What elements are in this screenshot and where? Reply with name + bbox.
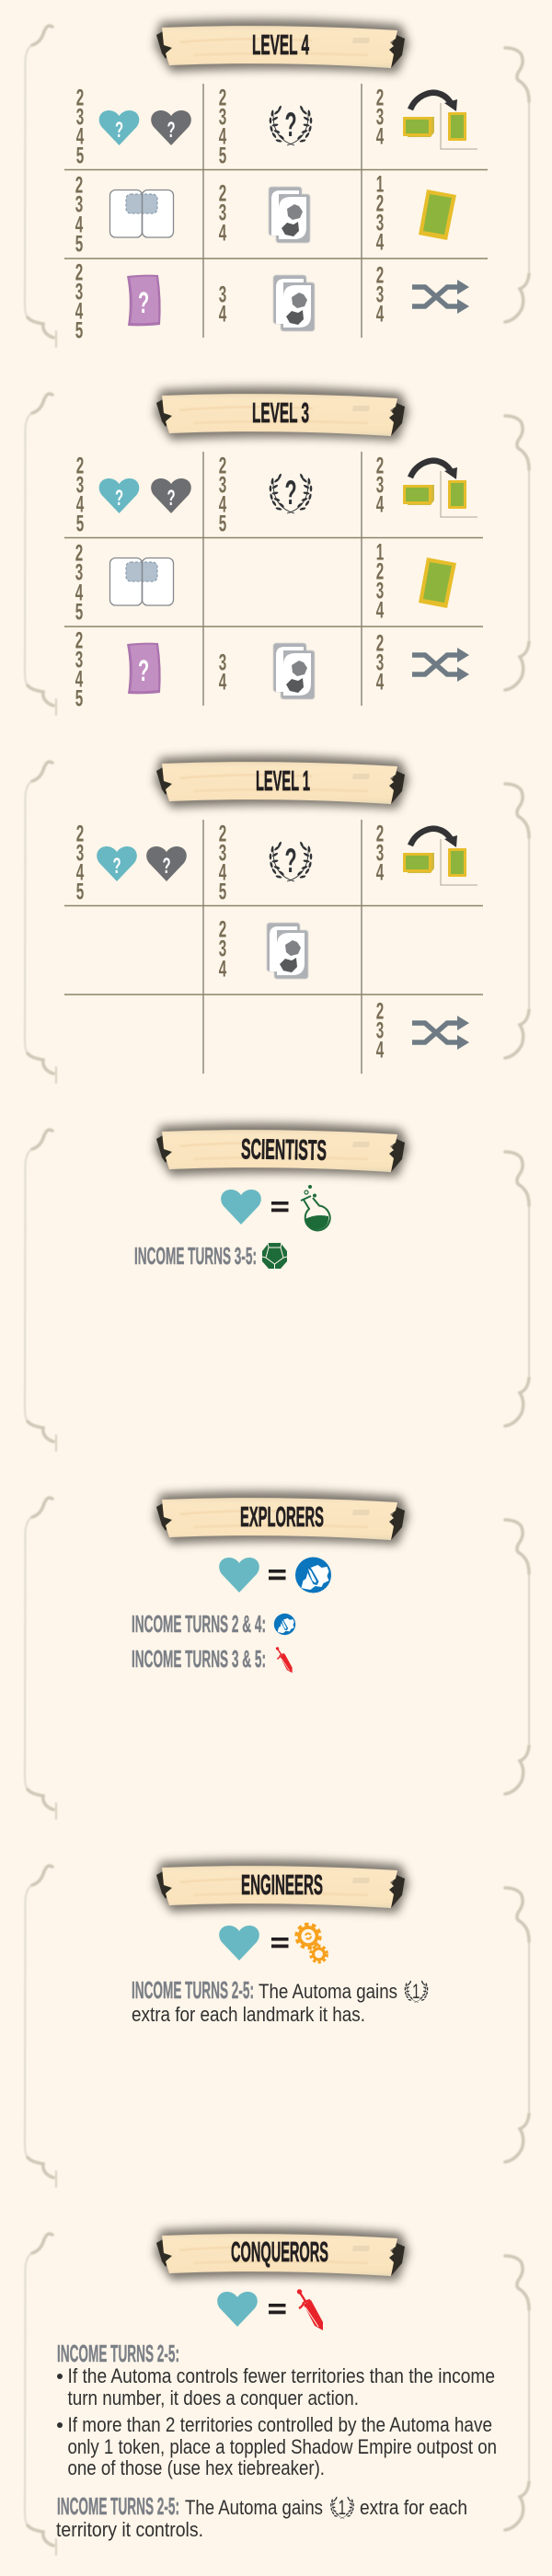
banner: engineers <box>155 1859 408 1913</box>
icon: deck with digits: 2 <box>219 917 226 943</box>
icon: card move with digits: 4 <box>376 124 385 150</box>
icon: deck with digits: 4 <box>219 221 227 247</box>
income line: turns 3 and 5 <box>132 1645 293 1673</box>
icon: card move with digits: 2 <box>376 86 384 111</box>
income text <box>132 1976 428 2026</box>
icon: shuffle with digits: 3 <box>376 1018 384 1044</box>
income bonus text: territory it controls. <box>56 2518 203 2541</box>
income line: turns 2 and 4 <box>132 1610 295 1638</box>
icon: laurel with digits <box>219 454 312 537</box>
icon: card move with digits: 3 <box>376 841 384 867</box>
icon: laurel with digits: 4 <box>219 492 227 518</box>
icon: deck with digits: 3 <box>219 937 226 962</box>
icon: card move with digits <box>376 454 477 518</box>
icon: purple card with digits: 4 <box>75 299 84 325</box>
income text: 1 <box>412 1980 420 2003</box>
icon: shuffle with digits: 2 <box>376 263 384 289</box>
icon: green card with digits: 4 <box>376 598 385 624</box>
icon: split cards with digits: 2 <box>75 541 83 567</box>
icon: laurel with digits: 5 <box>219 512 226 537</box>
banner: explorers <box>155 1491 408 1545</box>
icon: laurel with digits: ? <box>284 107 297 144</box>
icon: deck 3 4: 3 <box>219 650 226 676</box>
icon: green card with digits: 4 <box>376 230 385 256</box>
income bonus text: extra for each <box>360 2496 467 2519</box>
icon: purple card with digits: ? <box>138 654 149 687</box>
icon: purple card with digits: 3 <box>75 648 83 673</box>
icon: shuffle with digits: 2 <box>376 999 384 1025</box>
icon: deck 3 4: 4 <box>219 302 227 328</box>
banner: engineers: ENGINEERS <box>241 1869 323 1901</box>
icon: laurel with digits: 3 <box>219 105 226 131</box>
income line: INCOME TURNS 3-5: <box>134 1242 257 1270</box>
heart equals flask <box>221 1185 330 1230</box>
icon: green card with digits: 1 <box>376 172 384 198</box>
icon: shuffle with digits: 4 <box>376 1038 385 1064</box>
income text: INCOME TURNS 2-5: <box>132 1976 254 2004</box>
icon: laurel with digits: 3 <box>219 473 226 499</box>
heart equals gears <box>219 1925 327 1962</box>
icon: green card with digits: 3 <box>376 579 384 604</box>
icon: laurel with digits: ? <box>284 475 297 512</box>
icon: laurel with digits: 2 <box>219 454 226 479</box>
income rules text: one of those (use hex tiebreaker). <box>68 2456 325 2479</box>
income text: The Automa gains <box>259 1980 397 2003</box>
icon: split cards with digits: 5 <box>75 232 83 258</box>
icon: card move with digits: 3 <box>376 105 384 131</box>
icon: deck with digits: 3 <box>219 201 226 226</box>
income line: turns 2 and 4: INCOME TURNS 2 & 4: <box>132 1610 266 1638</box>
panel: explorers <box>25 1491 529 1819</box>
panel: level 4 <box>25 19 529 347</box>
icon: shuffle with digits: 3 <box>376 282 384 308</box>
icon: laurel with digits: 3 <box>219 841 226 867</box>
icon: deck with digits <box>219 917 308 983</box>
icon: hearts with digits <box>76 454 191 537</box>
icon: split cards with digits <box>75 541 173 626</box>
banner: level 3 <box>155 387 408 441</box>
banner: conquerors: CONQUERORS <box>231 2236 328 2268</box>
icon: hearts with digits: 2 <box>76 454 84 479</box>
icon: shuffle with digits: 2 <box>376 631 384 657</box>
icon: deck with digits <box>219 181 310 247</box>
icon: shuffle with digits <box>376 999 469 1064</box>
icon: laurel with digits: 5 <box>219 880 226 905</box>
banner: level 4: LEVEL 4 <box>252 29 309 61</box>
icon: hearts with digits <box>76 86 191 169</box>
income rules text <box>57 2340 497 2479</box>
icon: split cards with digits: 3 <box>75 560 83 586</box>
icon: purple card with digits: 5 <box>75 318 83 344</box>
icon: shuffle with digits <box>376 631 469 696</box>
icon: hearts with digits: 5 <box>76 512 84 537</box>
icon: card move with digits: 2 <box>376 822 384 847</box>
icon: deck with digits: 2 <box>219 181 226 207</box>
icon: laurel with digits: 5 <box>219 144 226 169</box>
banner: scientists: SCIENTISTS <box>241 1133 327 1167</box>
icon: hearts with digits: ? <box>115 119 123 143</box>
icon: deck 3 4: 4 <box>219 670 227 696</box>
icon: hearts with digits: ? <box>167 487 176 511</box>
income bonus text: 1 <box>339 2496 346 2519</box>
income rules text: If the Automa controls fewer territories than the income <box>68 2364 495 2387</box>
icon: purple card with digits: 5 <box>75 686 83 712</box>
icon: split cards with digits <box>75 173 173 258</box>
icon: laurel with digits: 2 <box>219 822 226 847</box>
icon: hearts with digits: ? <box>115 487 123 511</box>
icon: purple card with digits: 2 <box>75 628 83 654</box>
icon: card move with digits: 2 <box>376 454 384 479</box>
panel: level 3 <box>25 387 529 715</box>
panel: conquerors <box>25 2227 529 2555</box>
icon: laurel with digits <box>219 822 312 905</box>
income rules text: INCOME TURNS 2-5: <box>57 2340 179 2367</box>
icon: hearts with digits: ? <box>162 855 171 879</box>
income rules text: If more than 2 territories controlled by the Automa have <box>68 2413 492 2436</box>
icon: shuffle with digits: 4 <box>376 670 385 696</box>
icon: green card with digits: 1 <box>376 540 384 566</box>
icon: green card with digits: 2 <box>376 191 384 217</box>
banner: level 1: LEVEL 1 <box>256 765 310 797</box>
icon: green card with digits <box>376 540 456 624</box>
icon: purple card with digits: 4 <box>75 667 84 693</box>
banner: level 4 <box>155 19 408 73</box>
icon: card move with digits <box>376 86 477 150</box>
icon: laurel with digits <box>219 86 312 169</box>
icon: split cards with digits: 4 <box>75 581 84 606</box>
income line <box>134 1242 287 1270</box>
banner: explorers: EXPLORERS <box>240 1501 324 1533</box>
icon: hearts with digits: ? <box>167 119 176 143</box>
icon: hearts with digits: 2 <box>76 822 84 847</box>
heart equals sword <box>217 2289 323 2330</box>
heart equals compass <box>219 1557 331 1593</box>
icon: hearts with digits: ? <box>112 855 121 879</box>
icon: hearts with digits <box>76 822 187 905</box>
icon: green card with digits <box>376 172 456 256</box>
icon: card move with digits: 4 <box>376 860 385 886</box>
icon: hearts with digits: 5 <box>76 880 84 905</box>
icon: card move with digits <box>376 822 477 886</box>
icon: green card with digits: 3 <box>376 211 384 236</box>
icon: hearts with digits: 3 <box>76 105 84 131</box>
icon: purple card with digits <box>75 628 161 712</box>
icon: hearts with digits: 3 <box>76 473 84 499</box>
icon: laurel with digits: 4 <box>219 860 227 886</box>
panel: engineers <box>25 1859 529 2187</box>
icon: hearts with digits: 5 <box>76 144 84 169</box>
panel: level 1 <box>25 755 529 1083</box>
icon: card move with digits: 3 <box>376 473 384 499</box>
banner: level 1 <box>155 755 408 809</box>
icon: deck 3 4 <box>219 643 315 699</box>
icon: split cards with digits: 4 <box>75 213 84 238</box>
icon: science token <box>262 1243 287 1269</box>
icon: deck 3 4 <box>219 275 315 331</box>
banner: scientists <box>155 1123 408 1177</box>
icon: purple card with digits: 2 <box>75 260 83 286</box>
icon: hearts with digits: 2 <box>76 86 84 111</box>
icon: green card with digits: 2 <box>376 559 384 585</box>
icon: split cards with digits: 3 <box>75 192 83 218</box>
panel: scientists <box>25 1123 529 1451</box>
icon: shuffle with digits <box>376 263 469 328</box>
income text: extra for each landmark it has. <box>132 2003 365 2026</box>
icon: laurel with digits: ? <box>284 843 297 880</box>
icon: laurel with digits: 2 <box>219 86 226 111</box>
income line: turns 3 and 5: INCOME TURNS 3 & 5: <box>132 1645 266 1673</box>
income bonus text: The Automa gains <box>185 2496 323 2519</box>
icon: split cards with digits: 5 <box>75 600 83 626</box>
icon: hearts with digits: 3 <box>76 841 84 867</box>
income rules text: turn number, it does a conquer action. <box>68 2386 359 2409</box>
icon: split cards with digits: 2 <box>75 173 83 199</box>
icon: purple card with digits: 3 <box>75 280 83 305</box>
banner: conquerors <box>155 2227 408 2281</box>
banner: level 3: LEVEL 3 <box>252 397 309 429</box>
icon: shuffle with digits: 3 <box>376 650 384 676</box>
income bonus text: INCOME TURNS 2-5: <box>57 2492 179 2520</box>
icon: laurel with digits: 4 <box>219 124 227 150</box>
icon: hearts with digits: 4 <box>76 124 85 150</box>
income bonus text <box>56 2492 467 2541</box>
icon: deck with digits: 4 <box>219 957 227 983</box>
icon: purple card with digits: ? <box>138 286 149 319</box>
icon: hearts with digits: 4 <box>76 860 85 886</box>
icon: purple card with digits <box>75 260 161 344</box>
icon: deck 3 4: 3 <box>219 282 226 308</box>
icon: hearts with digits: 4 <box>76 492 85 518</box>
icon: card move with digits: 4 <box>376 492 385 518</box>
icon: shuffle with digits: 4 <box>376 302 385 328</box>
